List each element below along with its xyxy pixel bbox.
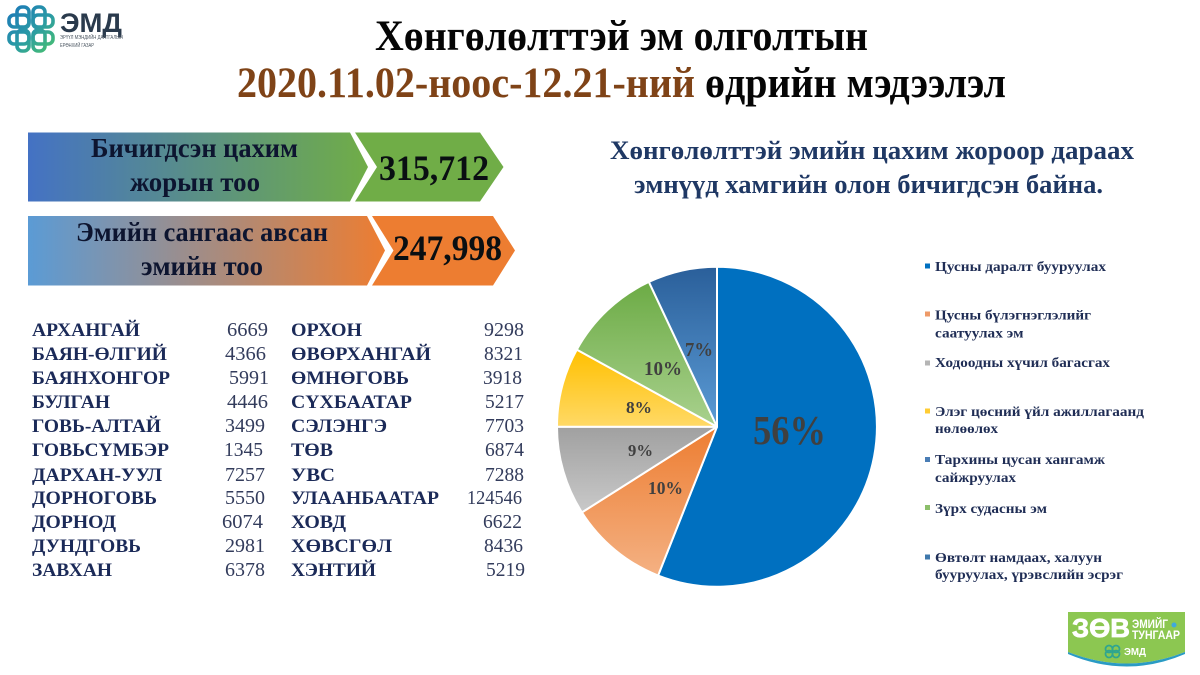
table: aimags right column: 7703 [485, 416, 524, 437]
table: aimags right column [291, 320, 525, 581]
icon: knot symbol [9, 7, 53, 51]
table: aimags right column: УЛААНБААТАР [291, 488, 439, 509]
table: aimags left column: 7257 [225, 465, 265, 486]
panel: prescriptions written [28, 132, 504, 202]
table: aimags right column: 3918 [483, 368, 522, 389]
legend item: pain relief: бууруулах, үрэвслийн эсрэг [935, 567, 1123, 582]
legend item: liver: Элэг цөсний үйл ажиллагаанд [935, 404, 1144, 419]
badge text: ЭМД: ЭМД [1124, 647, 1146, 658]
legend item: pain relief: Өвтөлт намдаах, халуун [935, 550, 1102, 565]
icon: small knot [1106, 646, 1120, 658]
table: aimags left column: 6074 [222, 512, 263, 533]
table: aimags left column: 6378 [225, 560, 265, 581]
legend item: stomach acid: Ходоодны хүчил багасгах [935, 355, 1110, 370]
table: aimags left column: 4446 [227, 392, 268, 413]
table: aimags left column: 5550 [225, 488, 265, 509]
pie labels: 9% [628, 441, 653, 460]
badge text: ЭМИЙГ ТУНГААР: ТУНГААР [1132, 630, 1180, 642]
pie chart [557, 267, 877, 587]
table: aimags left column: ГОВЬ-АЛТАЙ [32, 415, 161, 437]
logo: EMD top left [9, 7, 123, 51]
table: aimags right column: 124546 [467, 488, 522, 509]
table: aimags right column: ӨВӨРХАНГАЙ [291, 343, 431, 365]
table: aimags right column: ТӨВ [291, 440, 333, 461]
table: aimags left column: ЗАВХАН [32, 560, 112, 581]
pie labels: 56% [753, 407, 826, 453]
table: aimags left column: ГОВЬСҮМБЭР [32, 440, 169, 461]
table: aimags left column: 6669 [227, 320, 268, 341]
slice: 10% orange [582, 427, 717, 576]
table: aimags right column: СЭЛЭНГЭ [291, 416, 387, 437]
label: prescriptions: жорын тоо [130, 166, 260, 197]
table: aimags left column: 3499 [225, 416, 265, 437]
arrow bar: medicines label [28, 216, 385, 286]
badge bottom arc [1068, 652, 1185, 666]
badge text: ЗӨВ: ЗӨВ [1072, 613, 1130, 643]
chart heading: эмнүүд хамгийн олон бичигдсэн байна. [634, 170, 1103, 199]
icon: small leaf accent [1172, 622, 1176, 628]
pie labels: 8% [626, 398, 652, 417]
panel: medicines dispensed [28, 216, 515, 286]
pie labels [626, 339, 826, 498]
number: 247,998: 247,998 [393, 228, 502, 268]
table: aimags right column: 5219 [486, 560, 525, 581]
number: 315,712: 315,712 [379, 148, 489, 188]
table: aimags left column: 2981 [225, 536, 265, 557]
label: prescriptions: Бичигдсэн цахим [91, 132, 298, 163]
table: aimags right column: 8321 [484, 344, 523, 365]
legend item: brain: сайжруулах [935, 470, 1016, 485]
table: aimags left column: БАЯНХОНГОР [32, 368, 170, 389]
logo subtitle: ЭРҮҮЛ МЭНДИЙН ДААТГАЛЫН [60, 33, 123, 41]
legend item: anticoagulant [925, 308, 1091, 340]
logo: campaign badge bottom right [1068, 612, 1185, 666]
legend item: heart: Зүрх судасны эм [935, 501, 1047, 516]
chevron: prescriptions count [355, 132, 504, 202]
table: aimags left column: ДАРХАН-УУЛ [32, 465, 162, 486]
legend [925, 259, 1144, 582]
table: aimags left column: БАЯН-ӨЛГИЙ [32, 343, 167, 365]
legend item: liver: нөлөөлөх [935, 421, 998, 436]
table: aimags right column: ХӨВСГӨЛ [291, 536, 392, 557]
table: aimags right column: УВС [291, 465, 335, 486]
table: aimags right column: ХЭНТИЙ [291, 559, 376, 581]
table: aimags right column: ОРХОН [291, 320, 362, 341]
title line 2: өдрийн мэдээлэл [705, 60, 1006, 107]
pie labels: 7% [685, 339, 713, 361]
badge background [1068, 612, 1185, 664]
table: aimags left column: 4366 [225, 344, 266, 365]
chart heading: Хөнгөлөлттэй эмийн цахим жороор дараах [610, 136, 1134, 165]
title [237, 13, 1006, 107]
slice: 8% yellow [557, 350, 717, 427]
table: aimags right column: СҮХБААТАР [291, 392, 412, 413]
table: aimags left column: АРХАНГАЙ [32, 319, 140, 341]
table: aimags right column: ӨМНӨГОВЬ [291, 368, 409, 389]
pie labels: 10% [644, 358, 682, 380]
arrow bar: prescriptions label [28, 132, 368, 202]
table: aimags left column: 5991 [229, 368, 269, 389]
table: aimags right column: ХОВД [291, 512, 346, 533]
title line 1: Хөнгөлөлттэй эм олголтын [375, 13, 868, 60]
legend item: brain [925, 452, 1105, 485]
legend item: liver [925, 404, 1144, 436]
title line 2: 2020.11.02-ноос-12.21-ний [237, 60, 695, 107]
slice: 10% green [577, 282, 717, 427]
slice: 56% [658, 267, 877, 587]
legend item: pain relief [925, 550, 1123, 582]
table: aimags left column: ДУНДГОВЬ [32, 536, 141, 557]
legend item: blood pressure: Цусны даралт бууруулах [935, 259, 1106, 274]
table: aimags right column: 7288 [485, 465, 524, 486]
table: aimags right column: 6874 [485, 440, 524, 461]
legend item: brain: Тархины цусан хангамж [935, 452, 1105, 467]
table: aimags left column: ДОРНОД [32, 512, 116, 533]
table: aimags left column: ДОРНОГОВЬ [32, 488, 157, 509]
slice: 7% blue [649, 267, 717, 427]
pie labels: 10% [648, 478, 683, 498]
table: aimags right column: 5217 [485, 392, 524, 413]
label: medicines: эмийн тоо [141, 250, 263, 281]
slice: 9% gray [557, 427, 717, 512]
table: aimags left column [32, 319, 269, 581]
legend item: anticoagulant: Цусны бүлэгнэглэлийг [935, 308, 1091, 322]
table: aimags right column: 8436 [484, 536, 523, 557]
badge text: ЭМИЙГ ТУНГААР: ЭМИЙГ [1132, 618, 1168, 631]
table: aimags left column: БУЛГАН [32, 392, 110, 413]
logo wordmark: ЭМД [60, 8, 122, 38]
label: medicines: Эмийн сангаас авсан [76, 216, 328, 247]
table: aimags left column: 1345 [224, 440, 263, 461]
table: aimags right column: 6622 [483, 512, 522, 533]
logo subtitle: ЕРӨНХИЙ ГАЗАР [60, 41, 94, 49]
table: aimags right column: 9298 [484, 320, 524, 341]
legend item: anticoagulant: саатуулах эм [935, 326, 1024, 340]
chevron: medicines count [372, 216, 515, 286]
